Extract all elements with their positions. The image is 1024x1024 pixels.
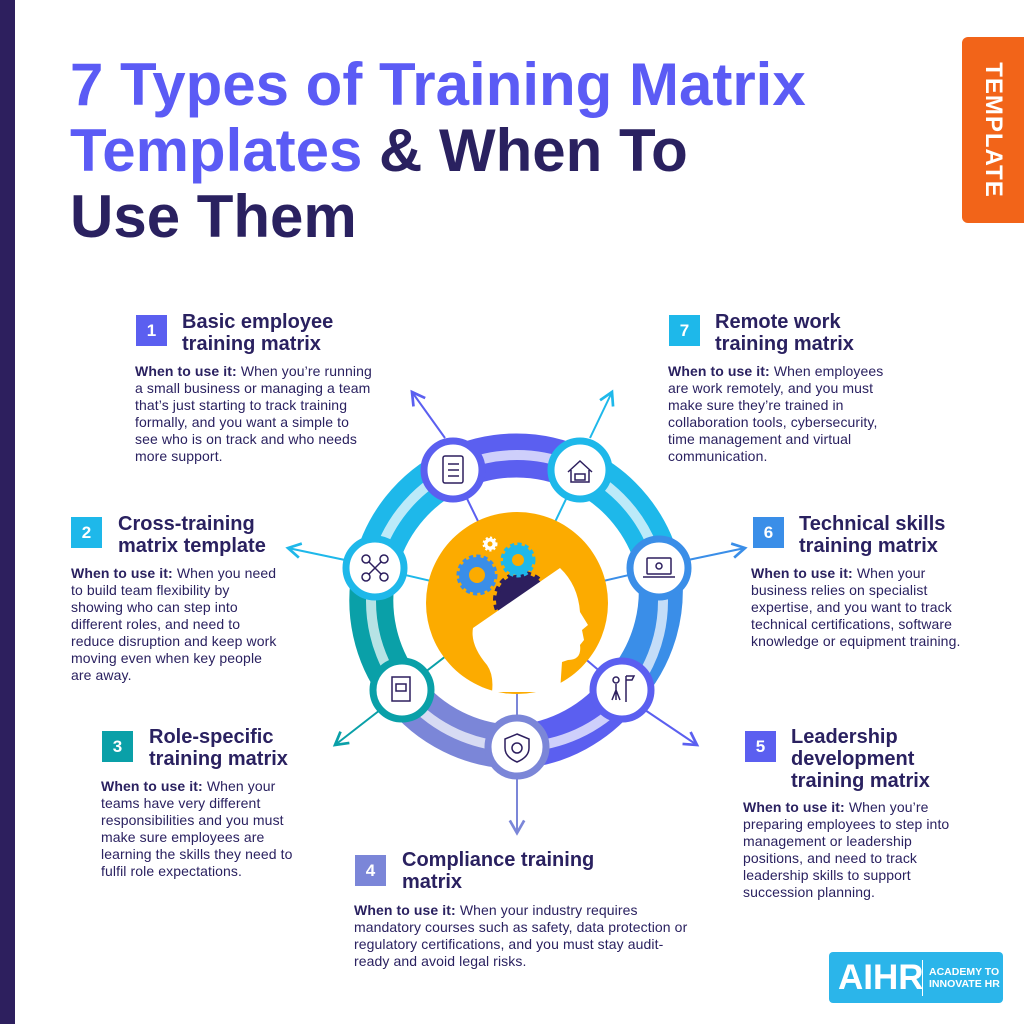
logo: INNOVATE HR <box>929 978 1000 990</box>
text: Technical skills <box>799 513 945 535</box>
spokes <box>375 470 659 747</box>
left strip <box>0 0 15 1024</box>
text: 1 <box>147 320 156 340</box>
icon circles <box>346 441 688 776</box>
text: matrix <box>402 871 462 893</box>
text: matrix template <box>118 535 266 557</box>
logo: ACADEMY TO <box>929 966 999 978</box>
text: When to use it: When employees are work remotely, and you must make sure they’re trained in collaboration tools, cybersecurity, time management and virtual communication. <box>668 363 883 464</box>
block 5 <box>743 726 949 900</box>
text: 3 <box>113 736 122 756</box>
text: 4 <box>366 860 375 880</box>
text: training matrix <box>715 333 854 355</box>
text: training matrix <box>182 333 321 355</box>
text: When to use it: When your teams have very different responsibilities and you must make sure employees are learning the skills they need to fulfil role expectations. <box>101 778 293 879</box>
block 7 <box>668 311 883 464</box>
text: When to use it: When your business relies on specialist expertise, and you want to track technical certifications, software knowledge or equipment training. <box>751 565 960 649</box>
arrows <box>412 392 445 438</box>
text: When to use it: When your industry requires mandatory courses such as safety, data protection or regulatory certifications, and you must stay audit-ready and avoid legal risks. <box>354 902 687 969</box>
text: Leadership <box>791 726 898 748</box>
logo: AIHR <box>838 958 924 997</box>
text: training matrix <box>149 748 288 770</box>
text: training matrix <box>791 770 930 792</box>
text: Role-specific <box>149 726 273 748</box>
title: Templates & When To <box>70 117 688 184</box>
block 2 <box>71 513 276 683</box>
text: 2 <box>82 522 91 542</box>
text: When to use it: When you’re running a small business or managing a team that’s just starting to track training formally, and you want a simple to see who is on track and who needs more support. <box>135 363 372 464</box>
text: development <box>791 748 914 770</box>
text: Basic employee <box>182 311 333 333</box>
logo <box>829 952 1003 1003</box>
block 3 <box>101 726 293 879</box>
block 6 <box>751 513 960 649</box>
template tab: TEMPLATE <box>980 62 1007 198</box>
text: Remote work <box>715 311 841 333</box>
text: Compliance training <box>402 849 594 871</box>
title: 7 Types of Training Matrix <box>70 51 806 118</box>
text: 6 <box>764 522 773 542</box>
block 4 <box>354 849 688 969</box>
text: Cross-training <box>118 513 255 535</box>
text: 5 <box>756 736 765 756</box>
text: 7 <box>680 320 689 340</box>
title: Use Them <box>70 183 357 250</box>
template tab <box>962 37 1024 223</box>
title <box>70 51 806 250</box>
text: training matrix <box>799 535 938 557</box>
center head <box>426 512 608 694</box>
text: When to use it: When you need to build team flexibility by showing who can step into different roles, and need to reduce disruption and keep work moving even when key people are away. <box>71 565 276 683</box>
text: When to use it: When you’re preparing employees to step into management or leadership positions, and need to track leadership skills to support succession planning. <box>743 799 949 900</box>
block 1 <box>135 311 372 464</box>
ring <box>371 455 661 747</box>
